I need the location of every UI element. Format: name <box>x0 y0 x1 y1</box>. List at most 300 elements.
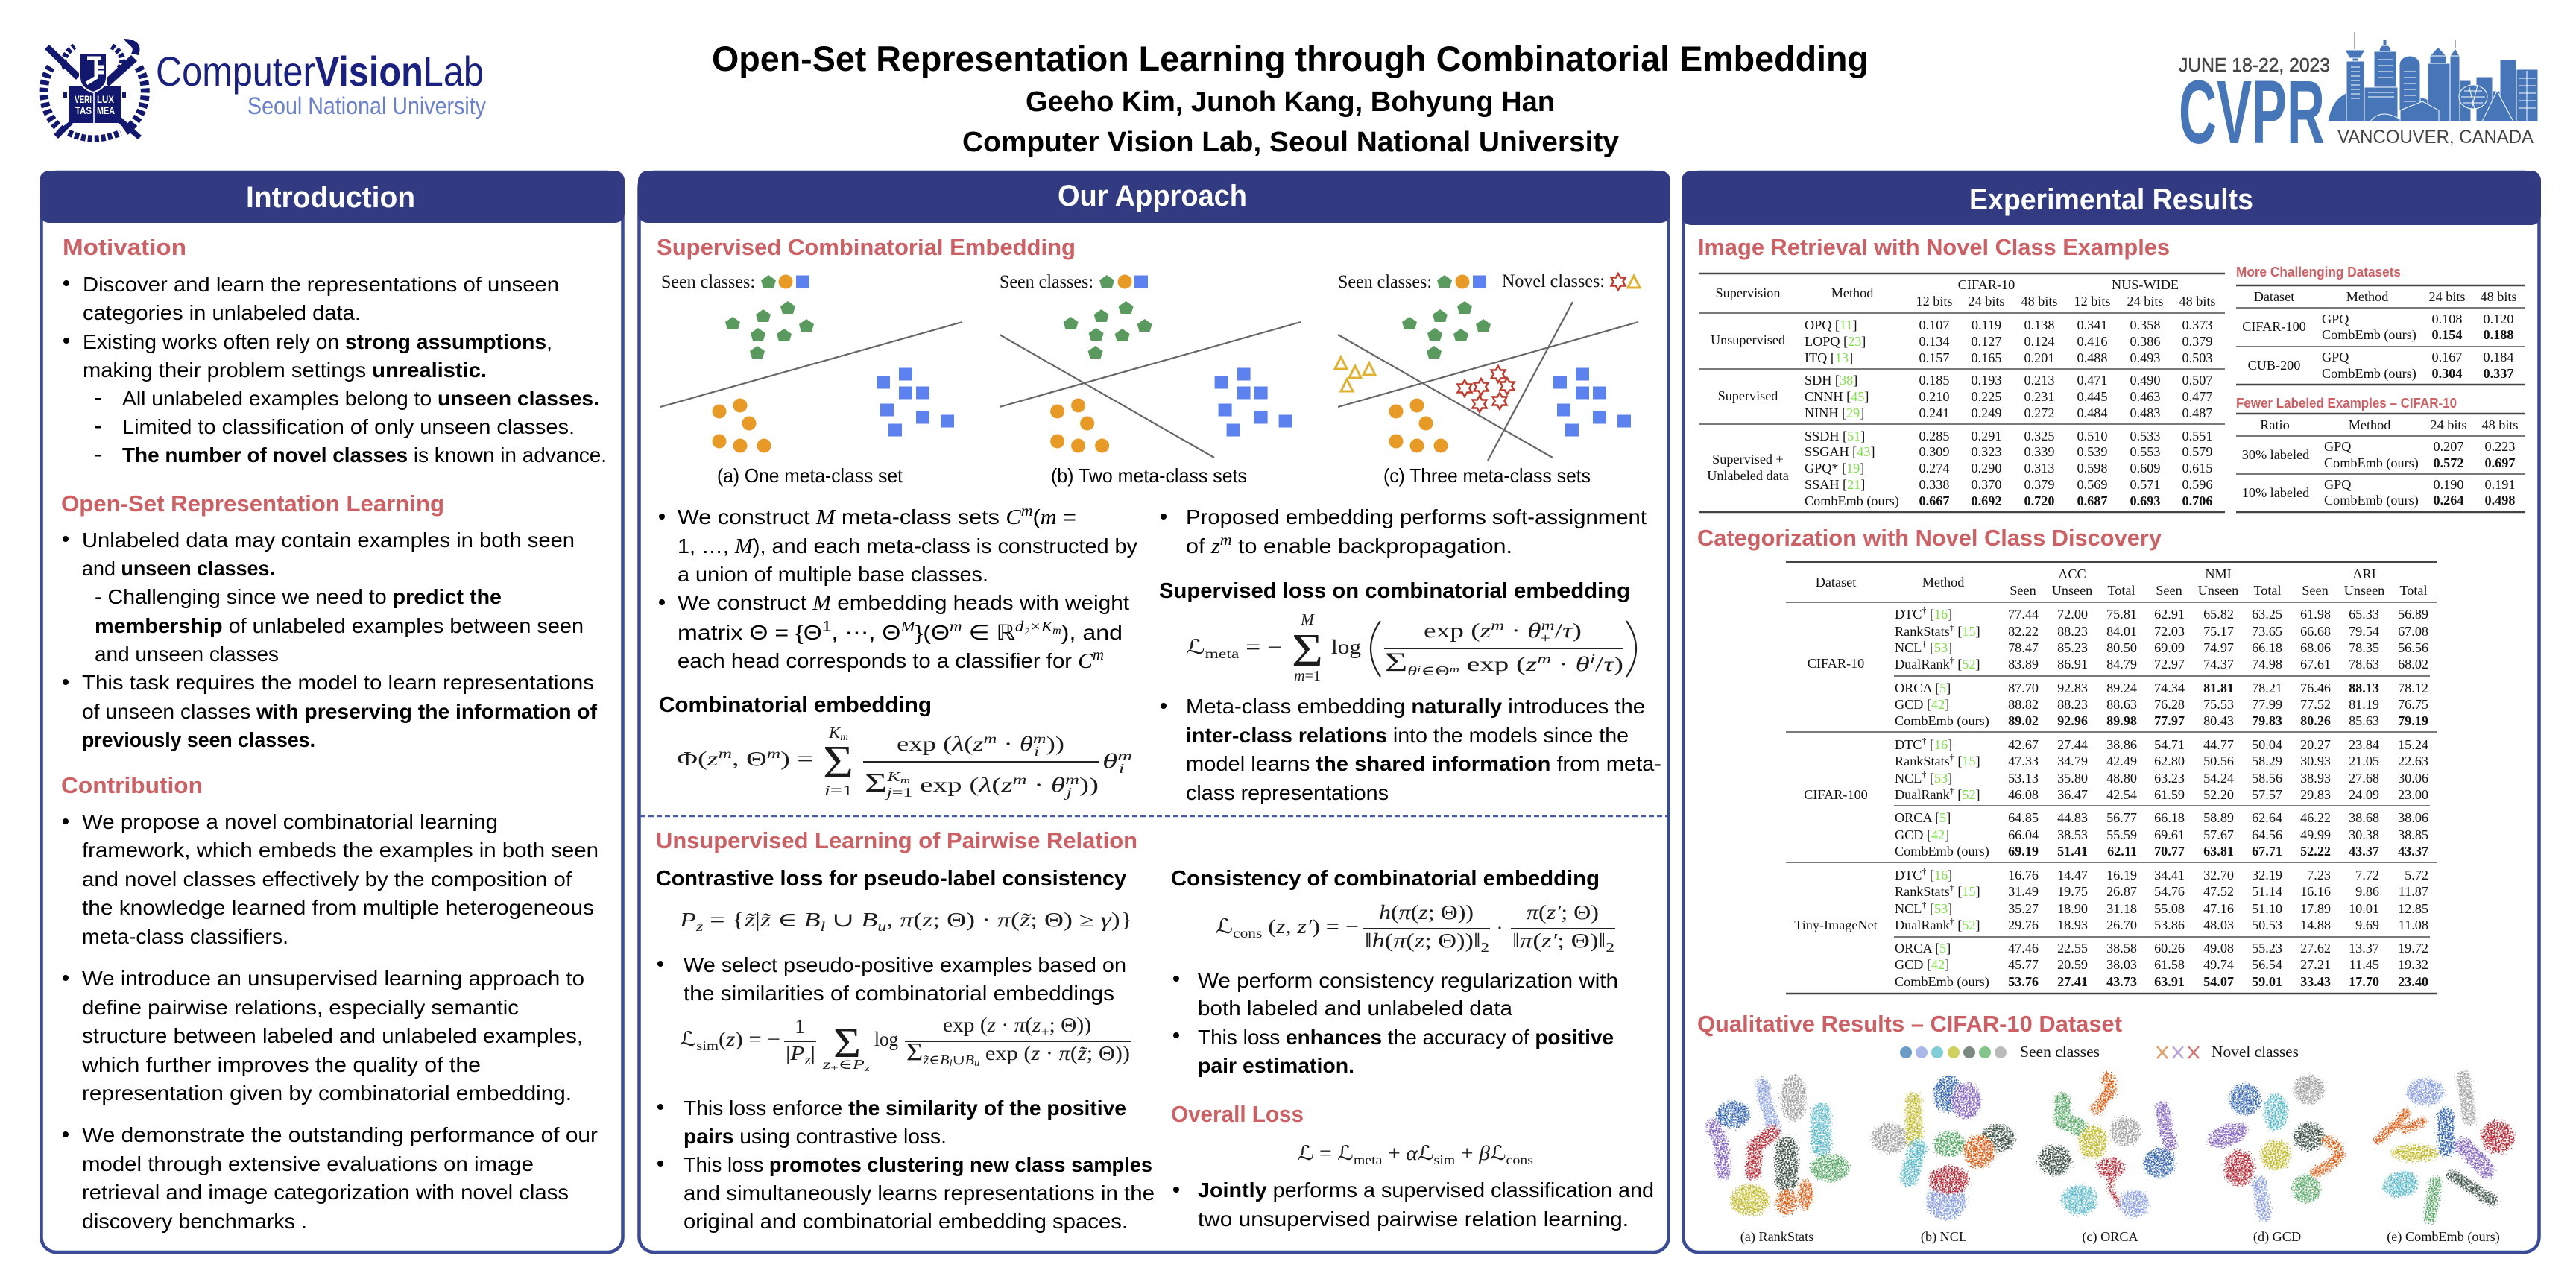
formula: consistency loss: ( <box>1262 915 1276 938</box>
table: novel class discovery results: 32.70 <box>2203 868 2234 883</box>
table: image retrieval results: 0.379 <box>2024 477 2054 492</box>
table: novel class discovery results: 30.38 <box>2349 827 2379 842</box>
table: novel class discovery results: 77.44 <box>2008 607 2039 622</box>
table: novel class discovery results: 88.23 <box>2057 624 2088 639</box>
formula: meta loss: m=1 <box>1294 668 1321 684</box>
table: novel class discovery results: 29.83 <box>2300 787 2331 802</box>
table: image retrieval results: 0.539 <box>2077 444 2107 459</box>
formula: combinatorial embedding: K <box>829 724 839 742</box>
table: novel class discovery results: 15] <box>1962 884 1980 899</box>
text: inter-class relations <box>1161 695 1661 804</box>
table: novel class discovery results: 49.08 <box>2203 941 2234 956</box>
text: soft assignment <box>1161 505 1647 558</box>
table: novel class discovery results: † <box>1922 866 1926 877</box>
heading: Fewer Labeled Examples: Fewer Labeled Examples – CIFAR-10 <box>2236 396 2457 411</box>
heading: Motivation: Motivation <box>63 234 186 260</box>
text: joint training: two unsupervised pairwise relation learning. <box>1198 1208 1629 1231</box>
table: image retrieval results: 0.488 <box>2077 350 2107 365</box>
table: novel class discovery results: DTC <box>1895 868 1922 883</box>
table: novel class discovery results: 45.77 <box>2008 957 2039 972</box>
table: novel class discovery results: 16.19 <box>2106 868 2137 883</box>
table: image retrieval results: 0.358 <box>2130 318 2160 332</box>
table: image retrieval results: CIFAR-10 <box>1958 277 2015 292</box>
table: novel class discovery results: 85.23 <box>2057 640 2088 655</box>
table: novel class discovery results: † <box>1950 752 1954 763</box>
table: novel class discovery results: 14.88 <box>2300 918 2331 932</box>
table: novel class discovery results: RankStats <box>1895 754 1950 768</box>
table: challenging datasets: 0.304 <box>2432 366 2462 381</box>
table: image retrieval results: 0.285 <box>1919 429 1949 443</box>
legend: seen and novel classes: Novel classes <box>2212 1043 2299 1061</box>
table: novel class discovery results: RankStats <box>1895 884 1950 899</box>
chart captions: (b) NCL <box>1921 1229 1967 1245</box>
table: novel class discovery results: 47.52 <box>2203 884 2234 899</box>
subheading: Consistency of combinatorial embedding: Consistency of combinatorial embedding <box>1171 867 1600 891</box>
table: novel class discovery results: 22.55 <box>2057 941 2088 956</box>
heading: More Challenging Datasets: More Challenging Datasets <box>2236 265 2401 280</box>
table: novel class discovery results: 38.86 <box>2106 737 2137 752</box>
contribution bullet list: which further improves the quality of the <box>81 1053 481 1076</box>
formula: combinatorial embedding: m <box>1117 748 1132 763</box>
table: image retrieval results: 0.290 <box>1972 461 2001 476</box>
table: novel class discovery results: 53] <box>1934 771 1952 786</box>
table: fewer labeled examples: 0.223 <box>2485 439 2515 454</box>
formula: similarity loss: u <box>974 1057 980 1068</box>
text: meta-class construction: a union of multiple base classes. <box>678 563 988 586</box>
contribution bullet list: representation given by combinatorial embedding. <box>82 1082 572 1105</box>
table: novel class discovery results: 89.24 <box>2106 681 2137 695</box>
scatter points <box>1389 301 1631 453</box>
table: image retrieval results: Supervision <box>1716 285 1780 300</box>
table: novel class discovery results: 74.37 <box>2203 657 2234 672</box>
panel frame <box>42 172 623 1252</box>
table: image retrieval results: Unlabeled data <box>1707 468 1789 483</box>
contribution bullet list: We introduce an unsupervised learning approach to <box>82 967 584 990</box>
text: meta-class construction: ∈ ℝ <box>962 621 1015 644</box>
table: novel class discovery results: Total <box>2399 583 2428 598</box>
formula: meta loss: τ) <box>1562 619 1579 642</box>
heading: Contribution: Contribution <box>61 772 203 798</box>
CVPR wordmark: CVPR <box>2179 61 2325 162</box>
formula: similarity loss: + <box>1041 1024 1049 1039</box>
table: novel class discovery results: 62.64 <box>2252 810 2282 825</box>
table: novel class discovery results: 72.97 <box>2154 657 2185 672</box>
table: challenging datasets: 0.167 <box>2432 350 2462 364</box>
table: novel class discovery results: 57.57 <box>2252 787 2282 802</box>
table: fewer labeled examples: 0.697 <box>2485 455 2515 470</box>
table: novel class discovery results: 47.46 <box>2008 941 2039 956</box>
table: novel class discovery results: 66.68 <box>2300 624 2331 639</box>
table: novel class discovery results: 62.80 <box>2154 754 2185 768</box>
table: novel class discovery results: † <box>1950 622 1954 633</box>
table: image retrieval results: 0.693 <box>2130 493 2160 508</box>
table: novel class discovery results: 78.63 <box>2349 657 2379 672</box>
formula: meta loss: M <box>1300 610 1315 628</box>
table: image retrieval results: GPQ* [19] <box>1805 461 1864 476</box>
table: novel class discovery results: 54.71 <box>2154 737 2185 752</box>
contribution bullet list <box>63 810 599 1233</box>
text: contrastive loss effects: and simultaneously learns representations in the <box>684 1181 1155 1205</box>
table: novel class discovery results: 38.68 <box>2349 810 2379 825</box>
table: image retrieval results: 0.373 <box>2182 318 2212 332</box>
authors: Geeho Kim, Junoh Kang, Bohyung Han <box>1026 86 1555 118</box>
table: novel class discovery results: [ <box>1954 657 1962 672</box>
formula: overall loss: βℒ <box>1479 1142 1504 1164</box>
formula: similarity loss: Σ <box>906 1038 923 1066</box>
text: meta-class construction: m = <box>1041 505 1075 529</box>
legend: seen classes: Seen classes: <box>1000 272 1093 292</box>
table: image retrieval results: 0.692 <box>1972 493 2001 508</box>
table: novel class discovery results: 38.93 <box>2300 771 2331 786</box>
table: image retrieval results: 0.615 <box>2182 461 2212 476</box>
table: image retrieval results: 0.370 <box>1972 477 2001 492</box>
table: image retrieval results: 0.463 <box>2130 389 2160 404</box>
table: challenging datasets: 48 bits <box>2480 289 2517 304</box>
table: novel class discovery results: 51.14 <box>2252 884 2282 899</box>
table: image retrieval results: 0.313 <box>2024 461 2054 476</box>
formula: pseudo-positive set: u <box>877 919 886 934</box>
table: novel class discovery results: 66.18 <box>2154 810 2185 825</box>
table: novel class discovery results: 15] <box>1962 754 1980 768</box>
table: image retrieval results: 0.598 <box>2077 461 2107 476</box>
table: image retrieval results: 12 bits <box>2074 294 2111 309</box>
table: image retrieval results: Supervised + <box>1712 452 1784 467</box>
motivation bullet list: Discover and learn the representations of unseen <box>83 273 559 296</box>
table: image retrieval results: 12 bits <box>1916 294 1953 309</box>
table: novel class discovery results: 52] <box>1962 657 1980 672</box>
table: novel class discovery results: 26.87 <box>2106 884 2137 899</box>
table: fewer labeled examples: CombEmb (ours) <box>2324 493 2419 508</box>
contribution bullet list: meta-class classifiers. <box>82 925 288 948</box>
table: novel class discovery results: 69.09 <box>2154 640 2185 655</box>
table: novel class discovery results: 63.91 <box>2154 974 2185 989</box>
formula: pseudo-positive set: ∪ <box>825 909 861 931</box>
table: novel class discovery results: 27.62 <box>2300 941 2331 956</box>
formula: pseudo-positive set: = { <box>703 909 745 931</box>
table: novel class discovery results: 57.67 <box>2203 827 2234 842</box>
text: consistency regularization <box>1173 969 1618 1077</box>
table: novel class discovery results: 72.03 <box>2154 624 2185 639</box>
table: novel class discovery results: 33.43 <box>2300 974 2331 989</box>
text: inter-class relations: class representations <box>1186 781 1389 804</box>
formula: combinatorial embedding: · <box>1026 774 1051 796</box>
open-set bullet list <box>63 528 598 751</box>
contribution bullet list: define pairwise relations, especially semantic <box>82 996 519 1019</box>
table: novel class discovery results: 54.07 <box>2203 974 2234 989</box>
contribution bullet list: We propose a novel combinatorial learning <box>82 810 498 833</box>
formula: similarity loss: z̃ <box>922 1052 930 1067</box>
contribution bullet list: We demonstrate the outstanding performance of our <box>82 1123 598 1146</box>
table: novel class discovery results: 88.63 <box>2106 697 2137 712</box>
table: fewer labeled examples: Method <box>2349 417 2390 432</box>
formula: combinatorial embedding: j=1 <box>886 785 906 800</box>
table: image retrieval results: SDH [38] <box>1805 373 1857 388</box>
text: meta-class construction: M <box>900 619 916 635</box>
table: challenging datasets <box>2236 285 2525 385</box>
table: novel class discovery results: 69.19 <box>2008 844 2039 859</box>
text: meta-class construction: d₂×K <box>1015 619 1054 635</box>
table: novel class discovery results: 84.79 <box>2106 657 2137 672</box>
formula: meta loss: exp ( z <box>1424 619 1488 642</box>
legend: novel classes: Novel classes: <box>1502 271 1605 291</box>
table: novel class discovery results: NCL <box>1895 640 1922 655</box>
table: novel class discovery results: Total <box>2253 583 2282 598</box>
table: image retrieval results: SSGAH [43] <box>1805 444 1875 459</box>
table: novel class discovery results: CombEmb (ours) <box>1895 974 1989 990</box>
table: novel class discovery results: 32.19 <box>2252 868 2282 883</box>
table: novel class discovery results: 30.06 <box>2398 771 2428 786</box>
table: novel class discovery results: CIFAR-10 <box>1808 656 1864 671</box>
table: novel class discovery results: † <box>1950 883 1954 893</box>
table: image retrieval results: Supervised <box>1718 388 1778 403</box>
table: novel class discovery results: ORCA [5] <box>1895 941 1951 956</box>
legend: seen classes: Seen classes: <box>1338 272 1432 292</box>
table: novel class discovery results: 88.23 <box>2057 697 2088 712</box>
formula: meta loss: exp ( <box>1459 653 1526 675</box>
text: consistency regularization: both labeled and unlabeled data <box>1198 997 1512 1020</box>
heading: Open-Set Representation Learning: Open-Set Representation Learning <box>61 490 444 517</box>
formula: pseudo-positive set: , <box>886 909 900 931</box>
table: image retrieval results: 0.416 <box>2077 334 2107 349</box>
table: novel class discovery results: 51.10 <box>2252 901 2282 916</box>
chart: t-SNE CombEmb <box>2378 1077 2514 1217</box>
contribution bullet list: discovery benchmarks . <box>82 1210 307 1233</box>
table: novel class discovery results: 11.08 <box>2399 918 2428 932</box>
table: novel class discovery results: 55.59 <box>2106 827 2137 842</box>
formula: similarity loss: + <box>830 1062 839 1073</box>
table: image retrieval results: 0.210 <box>1919 389 1949 404</box>
table: image retrieval results: 0.309 <box>1919 444 1949 459</box>
table: challenging datasets: CUB-200 <box>2248 358 2300 373</box>
table: fewer labeled examples: CombEmb (ours) <box>2324 455 2419 471</box>
formula: meta loss: · <box>1551 653 1576 675</box>
chart: t-SNE NCL <box>1872 1076 2015 1219</box>
table: novel class discovery results: 67.61 <box>2300 657 2331 672</box>
open-set bullet list: previously seen classes. <box>82 728 315 751</box>
table: novel class discovery results: 58.29 <box>2252 754 2282 768</box>
formula: consistency loss: ‖π(z′; Θ)‖ <box>1512 929 1595 952</box>
contribution bullet list: structure between labeled and unlabeled examples, <box>82 1024 583 1047</box>
table: novel class discovery results: 53] <box>1934 640 1952 655</box>
table: novel class discovery results: Seen <box>2302 583 2329 598</box>
table: novel class discovery results: 81.19 <box>2349 697 2379 712</box>
table: novel class discovery results: 21.05 <box>2349 754 2379 768</box>
formula: meta loss: meta <box>1205 646 1239 661</box>
table: novel class discovery results: 44.77 <box>2203 737 2234 752</box>
formula: meta loss: · <box>1504 619 1527 642</box>
table: novel class discovery results: 74.98 <box>2252 657 2282 672</box>
table: novel class discovery results: 7.23 <box>2307 868 2331 883</box>
motivation bullet list: Limited to classification of only unseen classes. <box>122 415 575 438</box>
table: novel class discovery results: 35.27 <box>2008 901 2039 916</box>
formula: pseudo-positive set: B <box>861 909 877 931</box>
table: image retrieval results: 0.379 <box>2182 334 2212 349</box>
text: meta-class construction: 1, …, M), and each meta-class is constructed by <box>678 534 1137 558</box>
chart captions: (c) ORCA <box>2082 1229 2138 1245</box>
table: novel class discovery results: † <box>1922 736 1926 746</box>
formula: similarity loss: B <box>965 1052 974 1067</box>
table: novel class discovery results: NMI <box>2205 566 2232 581</box>
table: novel class discovery results: 89.02 <box>2008 713 2039 728</box>
table: novel class discovery results: DTC <box>1895 607 1922 622</box>
table: novel class discovery results: 63.23 <box>2154 771 2185 786</box>
open-set bullet list: This task requires the model to learn representations <box>82 671 594 694</box>
table: novel class discovery results: 16.76 <box>2008 868 2039 883</box>
formula: consistency loss <box>1216 901 1615 955</box>
table: image retrieval results: 0.471 <box>2077 373 2107 388</box>
table: novel class discovery results: 23.00 <box>2398 787 2428 802</box>
table: novel class discovery results: 36.47 <box>2057 787 2088 802</box>
table: image retrieval results: 0.107 <box>1919 318 1949 332</box>
table: novel class discovery results: 64.56 <box>2252 827 2282 842</box>
table: novel class discovery results: Method <box>1922 575 1964 590</box>
table: novel class discovery results: 53.13 <box>2008 771 2039 786</box>
formula: combinatorial embedding: )) <box>1046 733 1064 755</box>
table: challenging datasets: 24 bits <box>2428 289 2466 304</box>
table: novel class discovery results: ACC <box>2058 566 2086 581</box>
heading: Experimental Results: Experimental Results <box>1969 183 2253 216</box>
text: soft assignment: of z <box>1186 534 1219 558</box>
table: image retrieval results: 0.503 <box>2182 350 2212 365</box>
text: contrastive loss effects: This loss enforce the similarity of the positive <box>684 1096 1126 1120</box>
formula: similarity loss: ∈B <box>929 1052 948 1067</box>
section: Open-Set Representation Learning <box>61 490 598 751</box>
text: meta-class construction: We construct M embedding heads with weight <box>678 591 1129 615</box>
formula: similarity loss: 1 <box>795 1015 805 1038</box>
table: novel class discovery results: 55.23 <box>2252 941 2282 956</box>
logo: CVPR 2023 Vancouver <box>2179 32 2538 162</box>
table: challenging datasets: 0.154 <box>2432 327 2462 342</box>
table: novel class discovery results <box>1786 562 2437 994</box>
table: challenging datasets: 0.337 <box>2484 366 2513 381</box>
table: novel class discovery results: 14.47 <box>2057 868 2088 883</box>
table: novel class discovery results: 66.18 <box>2252 640 2282 655</box>
formula: combinatorial embedding: exp ( λ(z <box>897 733 981 755</box>
table: novel class discovery results: 65.33 <box>2349 607 2379 622</box>
formula: meta loss: ∈Θ <box>1421 663 1449 678</box>
subheading: Combinatorial embedding: Combinatorial embedding <box>659 693 932 717</box>
formula: meta loss: m <box>1541 618 1555 633</box>
open-set bullet list: of unseen classes with preserving the information of <box>82 700 598 723</box>
legend: seen and novel classes <box>1900 1043 2299 1061</box>
formula: similarity loss: exp ( <box>979 1042 1031 1064</box>
table: novel class discovery results: † <box>1922 769 1926 780</box>
table: novel class discovery results: 52.22 <box>2300 844 2331 859</box>
section: Contribution <box>61 772 599 1233</box>
text: consistency regularization: We perform consistency regularization with <box>1198 969 1618 992</box>
table: novel class discovery results: † <box>1922 900 1926 910</box>
text: inter-class relations: Meta-class embedding naturally introduces the <box>1186 695 1645 718</box>
table: novel class discovery results: 74.34 <box>2154 681 2185 695</box>
table: novel class discovery results: [ <box>1926 607 1934 622</box>
text: meta-class construction: , ⋯, Θ <box>832 621 900 644</box>
heading: Unsupervised Learning of Pairwise Relation: Unsupervised Learning of Pairwise Relation <box>656 827 1137 853</box>
boundary lines <box>1338 302 1638 461</box>
text: meta-class construction: 1 <box>822 619 832 635</box>
table: novel class discovery results: 52] <box>1962 787 1980 802</box>
table: novel class discovery results: [ <box>1954 884 1962 899</box>
table: fewer labeled examples: 10% labeled <box>2242 485 2309 500</box>
table: novel class discovery results: 78.12 <box>2398 681 2428 695</box>
table: fewer labeled examples: 0.191 <box>2485 477 2515 492</box>
table: novel class discovery results: 48.03 <box>2203 918 2234 932</box>
table: novel class discovery results: 77.97 <box>2154 713 2185 728</box>
motivation bullet list: Existing works often rely on strong assumptions, <box>83 330 552 353</box>
formula: similarity loss: ∈ <box>839 1057 853 1072</box>
table: image retrieval results: ITQ [13] <box>1805 350 1853 365</box>
formula: meta loss: m <box>1449 663 1459 675</box>
heading: Introduction: Introduction <box>246 181 415 214</box>
table: novel class discovery results: 86.91 <box>2057 657 2088 672</box>
heading: Overall Loss: Overall Loss <box>1171 1101 1304 1127</box>
table: challenging datasets: 0.120 <box>2484 312 2513 326</box>
formula: pseudo-positive set: z <box>695 919 703 934</box>
open-set bullet list: - Challenging since we need to predict the <box>95 585 502 608</box>
table: image retrieval results: 0.533 <box>2130 429 2160 443</box>
table: novel class discovery results: 19.32 <box>2398 957 2428 972</box>
text: meta-class construction: m <box>1052 625 1061 637</box>
table: novel class discovery results: 46.22 <box>2300 810 2331 825</box>
figure: One meta-class set <box>660 272 962 487</box>
table: image retrieval results: 0.596 <box>2182 477 2212 492</box>
table: novel class discovery results: 11.45 <box>2349 957 2379 972</box>
table: novel class discovery results: 43.37 <box>2398 844 2428 859</box>
title: Open-Set Representation Learning through Combinatorial Embedding <box>712 39 1869 78</box>
table: novel class discovery results: [ <box>1926 901 1934 916</box>
formula: combinatorial embedding: ) = <box>780 748 813 770</box>
table: novel class discovery results: 38.85 <box>2398 827 2428 842</box>
formula: similarity loss: ℒ <box>680 1028 694 1050</box>
table: novel class discovery results: 47.33 <box>2008 754 2039 768</box>
table: novel class discovery results: † <box>1922 639 1926 649</box>
table: novel class discovery results: 62.91 <box>2154 607 2185 622</box>
text: soft assignment: to enable backpropagation. <box>1232 534 1512 558</box>
formula: similarity loss: ; Θ)) <box>1049 1014 1091 1036</box>
table: novel class discovery results: 56.89 <box>2398 607 2428 622</box>
table: novel class discovery results: 50.56 <box>2203 754 2234 768</box>
table: novel class discovery results: 73.65 <box>2252 624 2282 639</box>
text: contrastive loss effects: This loss promotes clustering new class samples <box>684 1153 1152 1176</box>
table: novel class discovery results: 53.86 <box>2154 918 2185 932</box>
chart captions: (a) RankStats <box>1740 1229 1813 1245</box>
table: novel class discovery results: 43.73 <box>2106 974 2137 989</box>
formula: combinatorial embedding: m <box>840 732 848 743</box>
chart captions: (d) GCD <box>2253 1229 2301 1245</box>
heading: Qualitative Results: Qualitative Results – CIFAR-10 Dataset <box>1697 1011 2122 1037</box>
table: novel class discovery results: 52.20 <box>2203 787 2234 802</box>
scatter points <box>1050 301 1292 453</box>
text: contrastive loss effects <box>657 1096 1155 1233</box>
text: consistency regularization: This loss enhances the accuracy of positive <box>1198 1026 1614 1049</box>
table: fewer labeled examples: GPQ <box>2324 439 2351 454</box>
text: meta-class construction: We construct M meta-class sets C <box>678 505 1020 529</box>
table: fewer labeled examples: 0.207 <box>2434 439 2463 454</box>
table: image retrieval results: 0.706 <box>2182 493 2212 508</box>
table: novel class discovery results: 9.86 <box>2355 884 2379 899</box>
table: novel class discovery results: 60.26 <box>2154 941 2185 956</box>
table: novel class discovery results: Unseen <box>2052 583 2092 598</box>
formula: similarity loss: sim <box>696 1038 719 1053</box>
table: novel class discovery results: 53.76 <box>2008 974 2039 989</box>
table: novel class discovery results: 50.04 <box>2252 737 2282 752</box>
chart captions <box>1740 1229 2500 1245</box>
formula: overall loss: + <box>1383 1142 1406 1164</box>
table: novel class discovery results: 76.28 <box>2154 697 2185 712</box>
formula: similarity loss: P <box>851 1057 865 1072</box>
table: fewer labeled examples: 24 bits <box>2430 417 2467 432</box>
table: novel class discovery results: RankStats <box>1895 624 1950 639</box>
table: novel class discovery results: 27.44 <box>2057 737 2088 752</box>
